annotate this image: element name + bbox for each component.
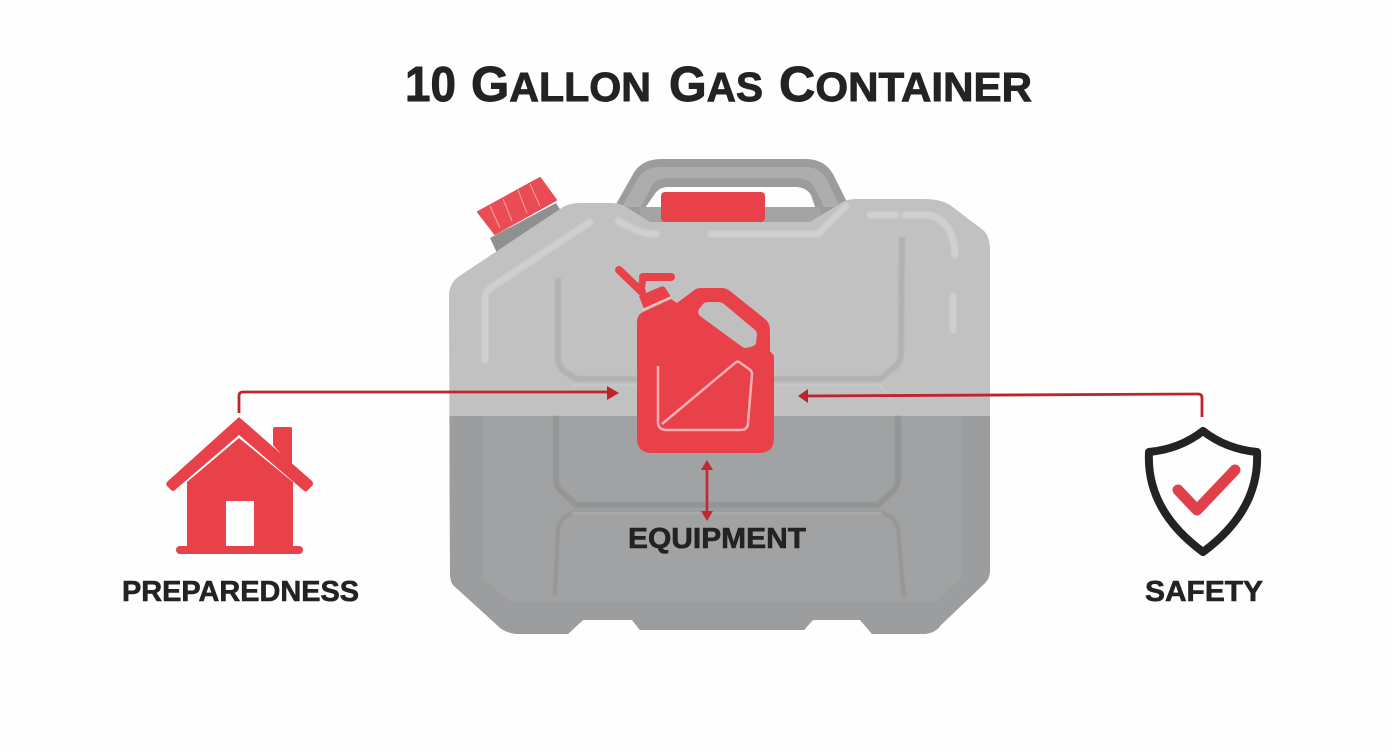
icon: shield with check: [1149, 431, 1257, 552]
red jerry can icon: [619, 270, 774, 453]
title: GALLON: [471, 58, 651, 112]
arrow: preparedness to can: [239, 386, 619, 413]
base: [176, 546, 303, 554]
container handle: [615, 159, 848, 226]
can label outline: [658, 362, 752, 430]
container cap: [478, 178, 563, 253]
label: equipment: EQUIPMENT: [628, 523, 807, 555]
label: safety: SAFETY: [1145, 576, 1263, 608]
infographic canvas: [124, 66, 1263, 634]
label: preparedness: PREPAREDNESS: [122, 576, 359, 608]
chimney: [273, 427, 292, 466]
check mark: [1178, 470, 1235, 510]
arrow: safety to can: [798, 389, 1202, 417]
can silhouette: [637, 288, 774, 453]
icon: house: [166, 417, 313, 554]
spout: [619, 270, 671, 309]
door: [226, 501, 254, 546]
title: CONTAINER: [779, 58, 1032, 112]
arrow: equipment double headed: [701, 460, 713, 521]
roof: [166, 417, 313, 491]
container body: [440, 190, 1000, 646]
handle red grip: [661, 192, 765, 222]
large gray fuel container: [440, 159, 1000, 646]
shield outline: [1149, 431, 1257, 552]
title: GAS: [669, 58, 763, 112]
can handle hole: [698, 302, 757, 348]
title: [405, 58, 1032, 112]
title: 10: [405, 58, 456, 112]
house walls: [187, 438, 293, 546]
